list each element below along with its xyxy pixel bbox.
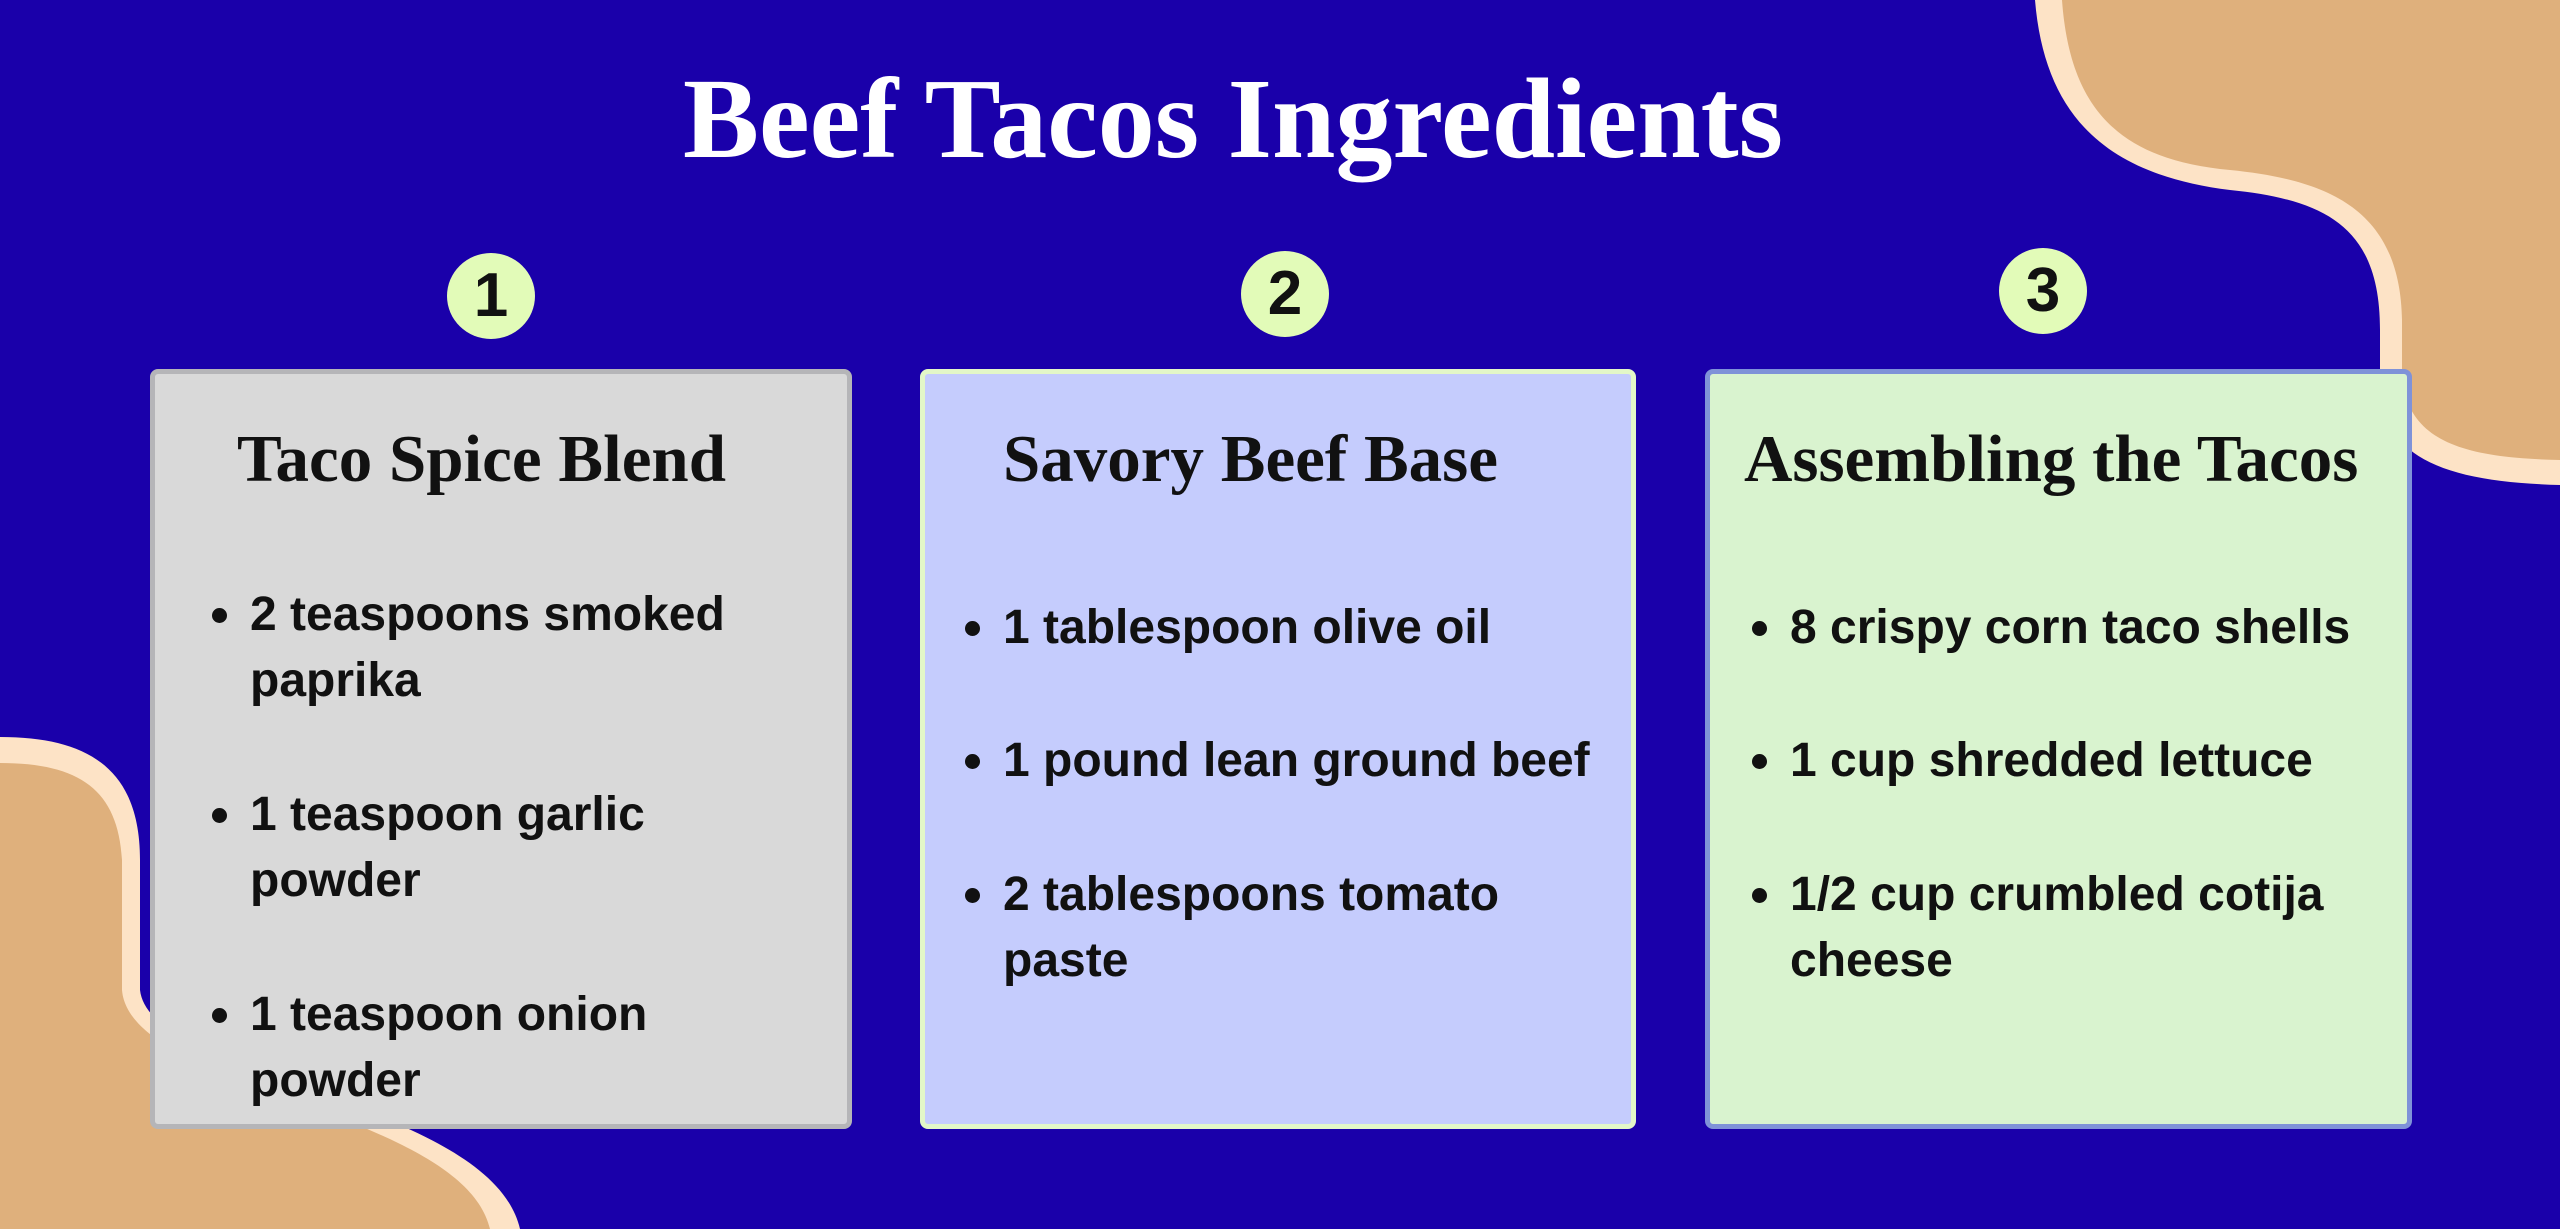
number badge 3: 3: [2026, 256, 2060, 325]
panel: taco spice blend: [150, 369, 852, 1129]
number badge 2: [1241, 251, 1329, 337]
item: 2 tablespoons tomato: [1003, 868, 1499, 921]
heading: Savory Beef Base: [1003, 422, 1498, 496]
heading: Taco Spice Blend: [237, 422, 726, 496]
item: 2 teaspoons smoked: [250, 588, 725, 641]
title: Beef Tacos Ingredients: [683, 55, 1783, 182]
item: powder: [250, 854, 421, 907]
item: paste: [1003, 934, 1128, 987]
number badge 1: [447, 253, 535, 339]
item: 1 teaspoon garlic: [250, 788, 645, 841]
item: [250, 582, 725, 714]
item: 1 teaspoon onion: [250, 988, 647, 1041]
item: 1 pound lean ground beef: [1003, 734, 1590, 787]
item: 8 crispy corn taco shells: [1790, 601, 2350, 654]
panel: savory beef base: [920, 369, 1636, 1129]
item: cheese: [1790, 934, 1953, 987]
item: 1/2 cup crumbled cotija: [1790, 868, 2323, 921]
item: powder: [250, 1054, 421, 1107]
item: 1 cup shredded lettuce: [1790, 734, 2313, 787]
number badge 2: 2: [1268, 259, 1302, 328]
item: 1 tablespoon olive oil: [1003, 601, 1491, 654]
panel: assembling the tacos: [1705, 369, 2412, 1129]
item: [250, 782, 645, 914]
item: [250, 982, 647, 1114]
item: [1003, 862, 1499, 994]
item: [1790, 862, 2323, 994]
number badge 3: [1999, 248, 2087, 334]
item: paprika: [250, 654, 421, 707]
heading: Assembling the Tacos: [1744, 422, 2358, 496]
number badge 1: 1: [474, 261, 508, 330]
